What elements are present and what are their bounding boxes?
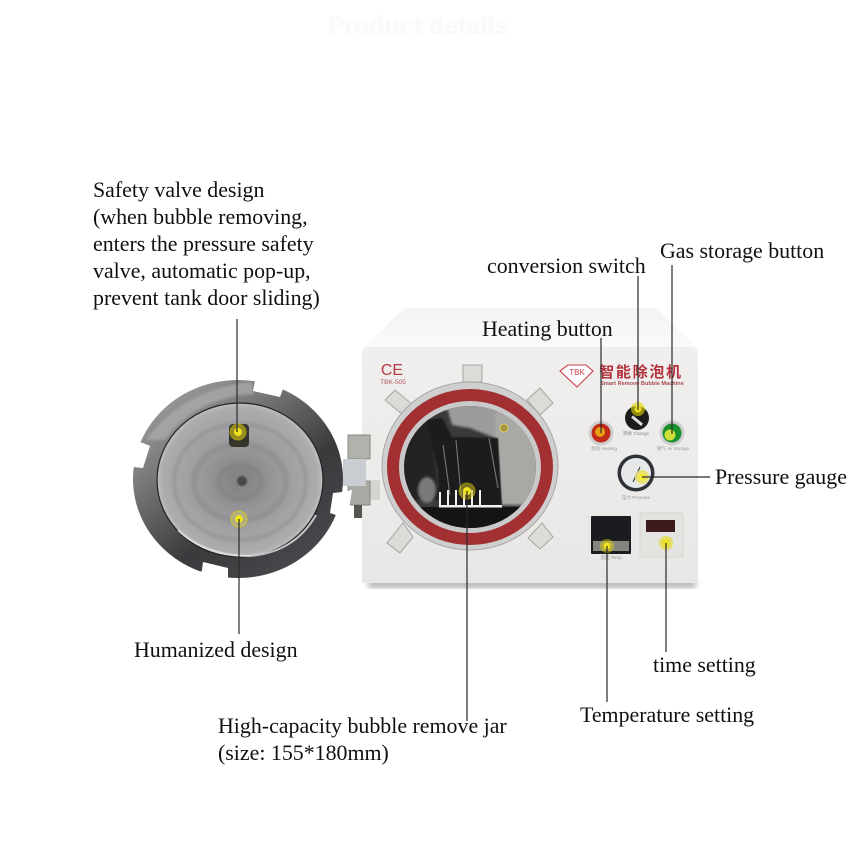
leader lines (237, 265, 710, 721)
timer (640, 513, 683, 557)
clamps (385, 365, 553, 553)
chamber bottom (420, 507, 520, 528)
red seal (387, 389, 553, 545)
door inner plate (157, 403, 323, 557)
door notch: top right (253, 370, 292, 397)
gauge label: 压力 Pressure (622, 494, 651, 501)
heating button (588, 420, 614, 446)
brand subtitle: Smart Remove Bubble Machine (600, 381, 684, 387)
chamber interior (404, 406, 536, 528)
door centre boss (237, 476, 247, 486)
plate swirl marks (174, 424, 306, 540)
temperature label: 温度 Temp (600, 554, 622, 561)
door highlight (146, 382, 254, 440)
label: safety valve: enters the pressure safety (93, 231, 314, 256)
label: heating button: Heating button (482, 316, 613, 341)
interior bolt (500, 424, 508, 432)
brand name: 智能除泡机 (599, 363, 683, 381)
chamber upper wall (446, 406, 508, 438)
controls (588, 402, 689, 561)
door flange (133, 380, 343, 578)
gas label: 储气 Air storage (657, 445, 689, 452)
door notch: bottom (195, 562, 228, 592)
chamber (404, 406, 536, 528)
label: jar: High-capacity bubble remove jar (218, 713, 507, 738)
temperature controller (591, 516, 631, 554)
machine body (362, 308, 698, 588)
chamber left wall (404, 419, 439, 501)
label: humanized design: Humanized design (134, 637, 298, 662)
hinge (343, 435, 380, 518)
label: conversion switch: conversion switch (487, 253, 646, 278)
TBK logo: TBK (569, 368, 585, 377)
label: safety valve: valve, automatic pop-up, (93, 258, 311, 283)
faint title: Product details (328, 12, 508, 40)
gas button (660, 420, 684, 446)
phone screens in rack (426, 418, 502, 506)
inner ring (399, 401, 541, 533)
screen edges (443, 438, 498, 495)
machine top face (364, 308, 696, 347)
pressure gauge (618, 454, 654, 492)
model label: TBK-505 (380, 379, 406, 386)
label: temperature setting: Temperature setting (580, 702, 754, 727)
label: pressure gauge: Pressure gauge (715, 464, 847, 489)
conversion knob (625, 402, 649, 430)
label: jar: (size: 155*180mm) (218, 740, 389, 765)
label: safety valve: (when bubble removing, (93, 204, 308, 229)
safety valve marker (230, 424, 246, 440)
rack (439, 490, 502, 508)
door notch: right (330, 490, 352, 522)
machine shadow (368, 580, 696, 588)
knob label: 转换 Change (623, 430, 650, 437)
porthole (382, 365, 558, 553)
label: time setting: time setting (653, 652, 756, 677)
silver ring (382, 382, 558, 550)
light patch (418, 477, 436, 503)
safety valve slot (229, 424, 249, 447)
label: gas storage: Gas storage button (660, 238, 824, 263)
TBK logo (560, 365, 593, 387)
chamber right wall (494, 413, 536, 507)
heating label: 加热 Heating (591, 445, 617, 452)
machine front panel (362, 347, 698, 583)
label: safety valve: prevent tank door sliding) (93, 285, 320, 310)
label: safety valve: Safety valve design (93, 177, 264, 202)
door rim highlight (178, 515, 316, 556)
CE mark: CE (381, 362, 403, 379)
jar marker (459, 483, 475, 499)
door notch: left (120, 440, 150, 468)
humanized design marker (231, 511, 247, 527)
detached door (120, 370, 352, 592)
